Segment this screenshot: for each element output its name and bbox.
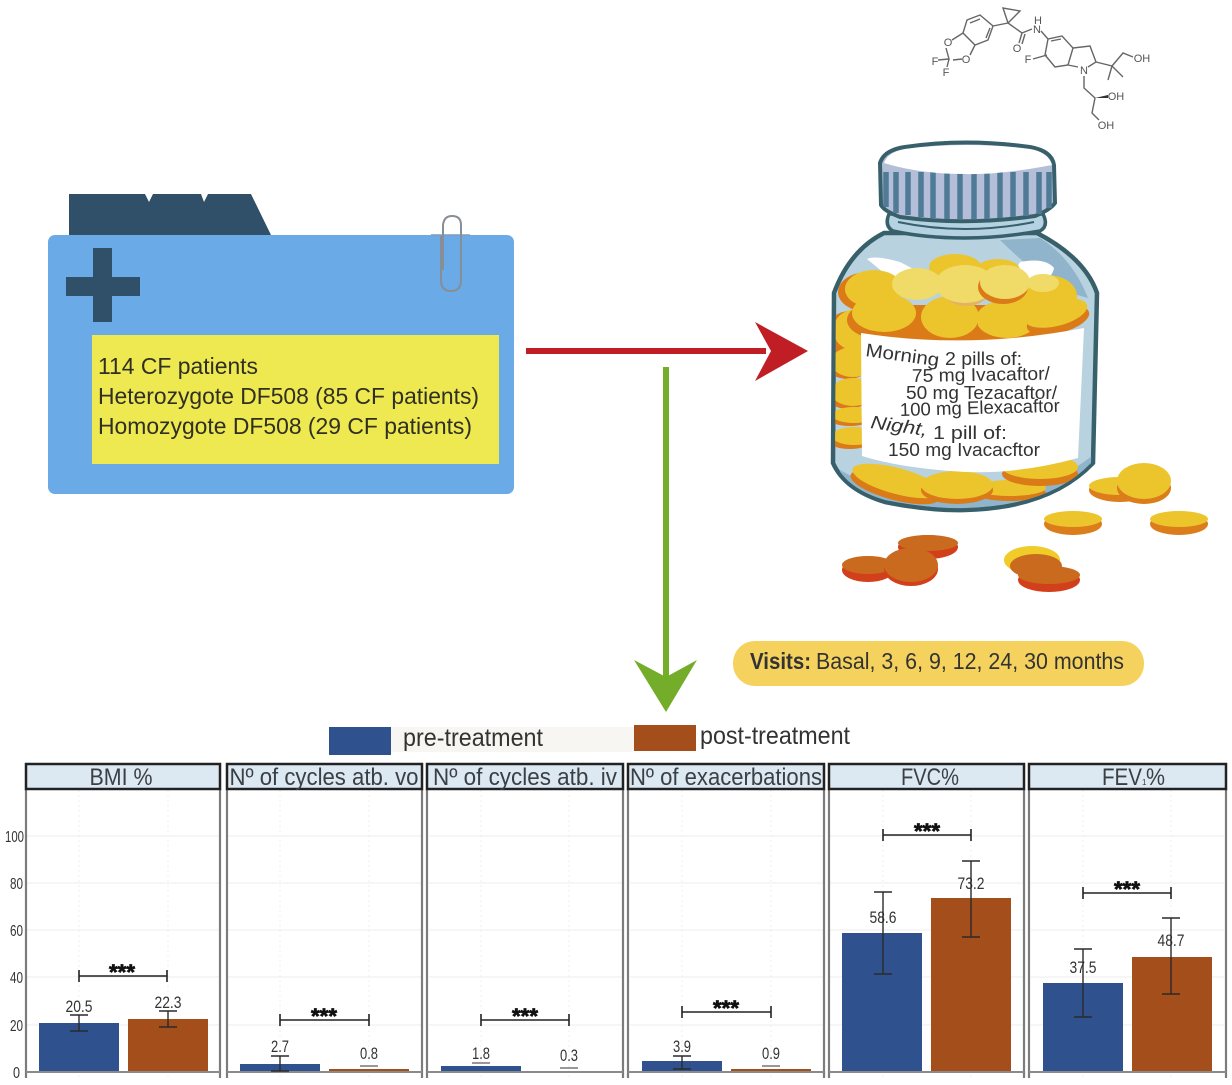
panel: cycles atb. iv: Nº of cycles atb. iv [433, 764, 617, 791]
bottle label: 2 pills of: [945, 348, 1022, 369]
bottle label: 50 mg Tezacaftor/ [906, 382, 1058, 403]
callout: visits: Visits: [750, 648, 811, 674]
molecule structure: F [943, 67, 950, 79]
y axis labels: 80 [10, 876, 23, 893]
panel: FEV1%: 48.7 [1158, 931, 1184, 950]
panel: cycles atb. vo [227, 764, 422, 1078]
bottle label: 75 mg Ivacaftor/ [912, 363, 1051, 386]
panel: cycles atb. vo: 2.7 [271, 1037, 289, 1056]
panel: BMI % [26, 764, 220, 1078]
panel: FVC%: *** [914, 820, 941, 843]
panel: cycles atb. iv: 1.8 [472, 1044, 490, 1063]
panel: FEV1%: % [1146, 764, 1165, 791]
panel: BMI %: *** [109, 961, 136, 984]
molecule structure: H [1034, 15, 1042, 27]
scattered red-orange pills [842, 535, 1080, 592]
molecule structure: N [1033, 24, 1041, 36]
bottle neck [887, 214, 1045, 238]
panel: exacerbations: Nº of exacerbations [630, 764, 822, 791]
bottle label: Night, [869, 411, 929, 440]
panel: exacerbations: 0.9 [762, 1044, 780, 1063]
panel: FEV1%: *** [1114, 878, 1141, 901]
bottle cap [880, 142, 1055, 221]
patient info box [92, 335, 499, 464]
scattered yellow pills [1004, 463, 1208, 574]
panel: BMI %: 20.5 [66, 997, 92, 1016]
molecule structure: OH [1108, 91, 1124, 103]
panel: exacerbations [628, 764, 824, 1078]
y axis labels [5, 829, 24, 1082]
molecule structure: O [962, 54, 971, 66]
legend [329, 722, 850, 755]
molecule structure: OH [1134, 53, 1150, 65]
panel: cycles atb. vo: Nº of cycles atb. vo [230, 764, 418, 791]
bottle highlight [1000, 238, 1088, 298]
bottle glass body [833, 233, 1097, 510]
y axis labels: 40 [10, 970, 23, 987]
legend: post-treatment: post-treatment [700, 722, 850, 750]
y axis labels: 100 [5, 829, 24, 846]
panel: cycles atb. iv [427, 764, 623, 1078]
arrow: red, to treatment [526, 322, 808, 381]
panel: FEV1%: FEV [1102, 764, 1142, 791]
panel: BMI %: BMI % [90, 764, 152, 791]
panel: FVC% [829, 764, 1024, 1078]
y axis labels: 0 [13, 1065, 20, 1082]
callout: visits [733, 641, 1144, 686]
folder: patient cohort [48, 194, 514, 494]
bottle label [861, 328, 1084, 472]
panel: cycles atb. vo: 0.8 [360, 1044, 378, 1063]
bottle label: 1 pill of: [933, 422, 1007, 443]
panel: FEV1%: 37.5 [1070, 958, 1096, 977]
bottle label: 150 mg Ivacacftor [888, 439, 1040, 460]
molecule structure: F [932, 56, 939, 68]
legend: post-treatment [634, 722, 850, 751]
molecule structure: O [1013, 43, 1022, 55]
panel: FEV1% [1029, 764, 1226, 1078]
patient info box: Heterozygote DF508 (85 CF patients) [98, 383, 479, 409]
panel: cycles atb. iv: 0.3 [560, 1046, 578, 1065]
legend: pre-treatment: pre-treatment [403, 724, 543, 752]
panel: FVC%: 73.2 [958, 874, 984, 893]
panel: BMI %: 22.3 [154, 993, 182, 1012]
icon: medical cross [66, 248, 140, 322]
icon: paperclip [431, 216, 470, 291]
panel: FEV1%: 1 [1142, 778, 1147, 787]
callout: visits: Basal, 3, 6, 9, 12, 24, 30 months [816, 648, 1124, 674]
bottle label: Morning [864, 339, 941, 370]
bottle label: 100 mg Elexacaftor [900, 395, 1060, 420]
molecule structure: F [1025, 54, 1032, 66]
pills inside bottle [826, 254, 1093, 511]
panel: exacerbations: *** [713, 997, 740, 1020]
patient info box: 114 CF patients [98, 353, 258, 379]
y axis labels: 60 [10, 923, 23, 940]
arrow: green, to outcomes [634, 367, 697, 712]
folder tab [69, 194, 271, 235]
molecule structure [932, 8, 1150, 132]
molecule structure: OH [1098, 120, 1114, 132]
panel: cycles atb. iv: *** [512, 1005, 539, 1028]
pill bottle [826, 142, 1097, 511]
molecule structure: O [944, 37, 953, 49]
folder body [48, 235, 514, 494]
panel: exacerbations: 3.9 [673, 1037, 691, 1056]
panel: cycles atb. vo: *** [311, 1005, 338, 1028]
panel: FVC%: FVC% [901, 764, 959, 791]
molecule structure: N [1080, 65, 1088, 77]
patient info box: Homozygote DF508 (29 CF patients) [98, 413, 472, 439]
legend: pre-treatment [329, 724, 543, 755]
y axis labels: 20 [10, 1018, 23, 1035]
panel: FVC%: 58.6 [870, 908, 896, 927]
